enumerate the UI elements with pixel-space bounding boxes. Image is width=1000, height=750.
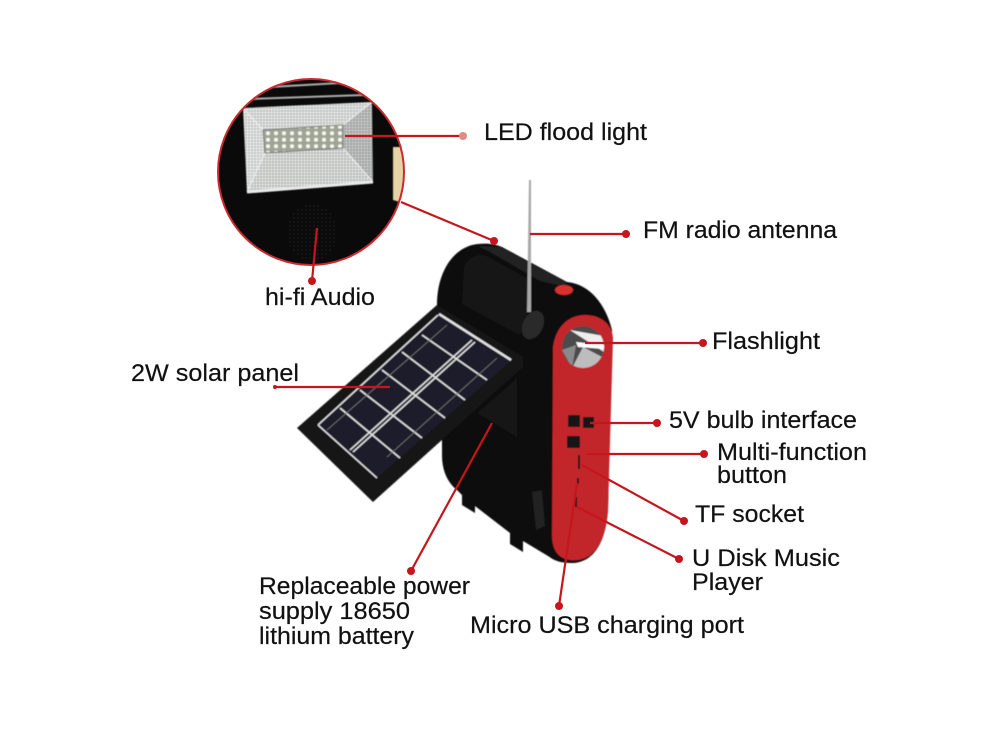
flood light top bars	[250, 83, 364, 99]
label: Replaceable power supply 18650 lithium battery: supply 18650	[259, 598, 410, 625]
label: 2W solar panel: 2W solar panel	[131, 360, 299, 387]
solar panel frame	[297, 305, 523, 502]
reflector shading	[243, 110, 264, 186]
cream background sliver	[392, 146, 403, 202]
label: Replaceable power supply 18650 lithium battery: lithium battery	[259, 623, 414, 650]
handle recess	[462, 255, 532, 335]
label: U Disk Music Player: U Disk Music	[692, 545, 840, 572]
flood light housing	[243, 102, 373, 192]
label: hi-fi Audio: hi-fi Audio	[265, 284, 375, 311]
label: Micro USB charging port: Micro USB charging port	[470, 612, 744, 639]
label: TF socket: TF socket	[695, 501, 804, 528]
label: Multi-function button: Multi-function	[717, 439, 867, 466]
speaker grille	[290, 205, 334, 259]
label: Flashlight: Flashlight	[712, 328, 820, 355]
label: FM radio antenna: FM radio antenna	[643, 217, 838, 244]
label: Replaceable power supply 18650 lithium battery: Replaceable power	[259, 573, 470, 600]
flashlight lens	[562, 326, 604, 370]
back compartment	[477, 378, 517, 437]
label: Multi-function button: button	[717, 462, 787, 489]
solar panel cells	[318, 315, 512, 478]
label: LED flood light: LED flood light	[484, 119, 647, 146]
solar panel grid lines	[318, 314, 511, 478]
antenna	[527, 180, 531, 312]
handle top highlights	[478, 246, 566, 287]
sockets	[567, 415, 594, 507]
callout lines	[275, 136, 704, 606]
side USB cover	[532, 490, 545, 530]
zoom circle: flood light and speaker	[218, 79, 410, 265]
LED array	[263, 125, 343, 153]
callout dots	[273, 132, 708, 610]
label: 5V bulb interface: 5V bulb interface	[669, 407, 857, 434]
label: U Disk Music Player: Player	[692, 569, 763, 596]
zoom circle outline	[218, 79, 404, 265]
red front face	[552, 315, 613, 560]
product: solar radio body	[297, 180, 613, 563]
red power button	[555, 285, 573, 295]
radio housing	[437, 244, 612, 563]
antenna base	[518, 307, 548, 343]
